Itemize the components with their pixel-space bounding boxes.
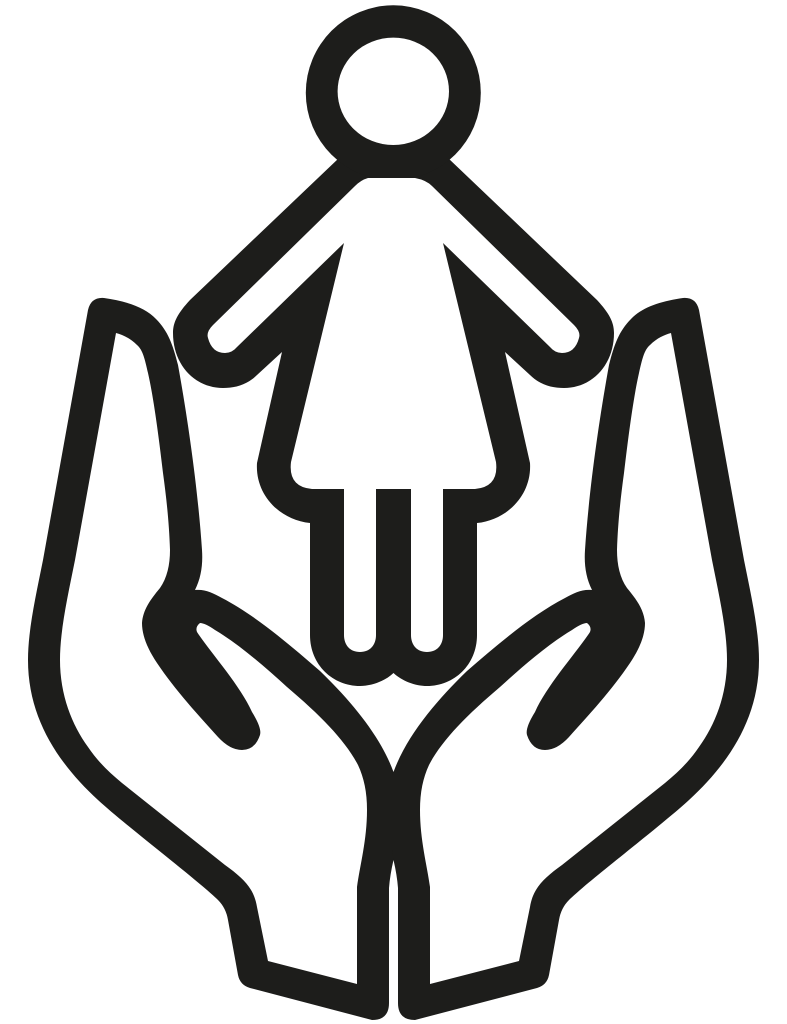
icon: girl figure xyxy=(173,5,614,686)
figure body interior xyxy=(208,178,579,652)
figure body outline xyxy=(173,158,614,686)
icon: right hand xyxy=(392,298,759,1020)
icon: left hand xyxy=(28,298,395,1020)
figure head xyxy=(306,5,481,180)
